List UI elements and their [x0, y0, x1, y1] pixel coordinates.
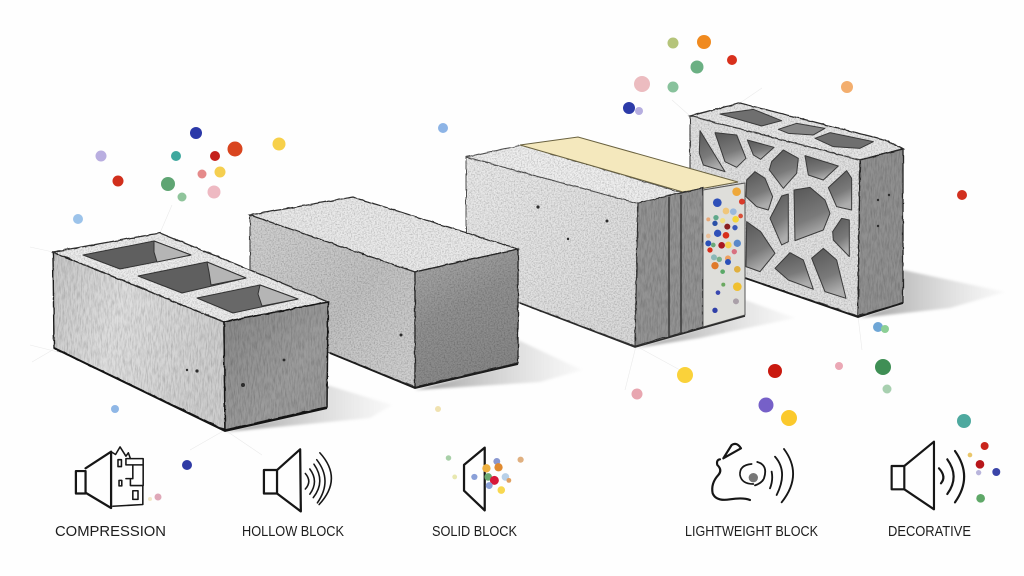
decorative block front face [690, 116, 860, 316]
solid block left face [250, 215, 415, 387]
decorative block top [690, 103, 903, 160]
solid block top [250, 197, 518, 272]
insulation end face [703, 183, 745, 327]
faint construction lines [30, 88, 862, 455]
hollow cells [83, 241, 298, 313]
surface pits [186, 194, 890, 387]
decorative block [690, 103, 903, 317]
icon: hollow block speaker [264, 449, 331, 511]
hollow block end face [224, 302, 328, 430]
solid block base edge [330, 353, 518, 388]
hollow block base edge [54, 348, 327, 431]
icon: lightweight block sketch [712, 444, 793, 502]
decorative block side face [858, 149, 903, 316]
lightweight block grey top [466, 145, 683, 204]
icon: compression speaker house [76, 447, 143, 508]
solid block right face [415, 249, 518, 387]
lattice openings [699, 109, 873, 298]
label: lightweight block: LIGHTWEIGHT BLOCK [685, 524, 818, 540]
floating colour dots [73, 35, 971, 501]
lightweight block grooved end [635, 188, 703, 346]
decorative block base edge [745, 278, 903, 317]
hollow block [53, 233, 328, 431]
hollow block top [53, 233, 328, 322]
icon: decorative speaker with dots [892, 442, 1000, 509]
solid block [250, 197, 518, 388]
label: compression: COMPRESSION [55, 524, 166, 540]
end face grooves [669, 195, 681, 337]
label: solid block: SOLID BLOCK [432, 524, 517, 540]
label: decorative: DECORATIVE [888, 524, 971, 540]
lightweight block base edge [520, 303, 745, 347]
lightweight block left face [466, 157, 638, 346]
hollow block left face [53, 252, 225, 430]
ground shadows [225, 270, 1005, 432]
label: hollow block: HOLLOW BLOCK [242, 524, 344, 540]
coloured particles [705, 187, 745, 313]
icon: solid block speaker with dots [446, 448, 524, 510]
lightweight block [466, 137, 745, 347]
lightweight block yellow top [520, 137, 738, 192]
